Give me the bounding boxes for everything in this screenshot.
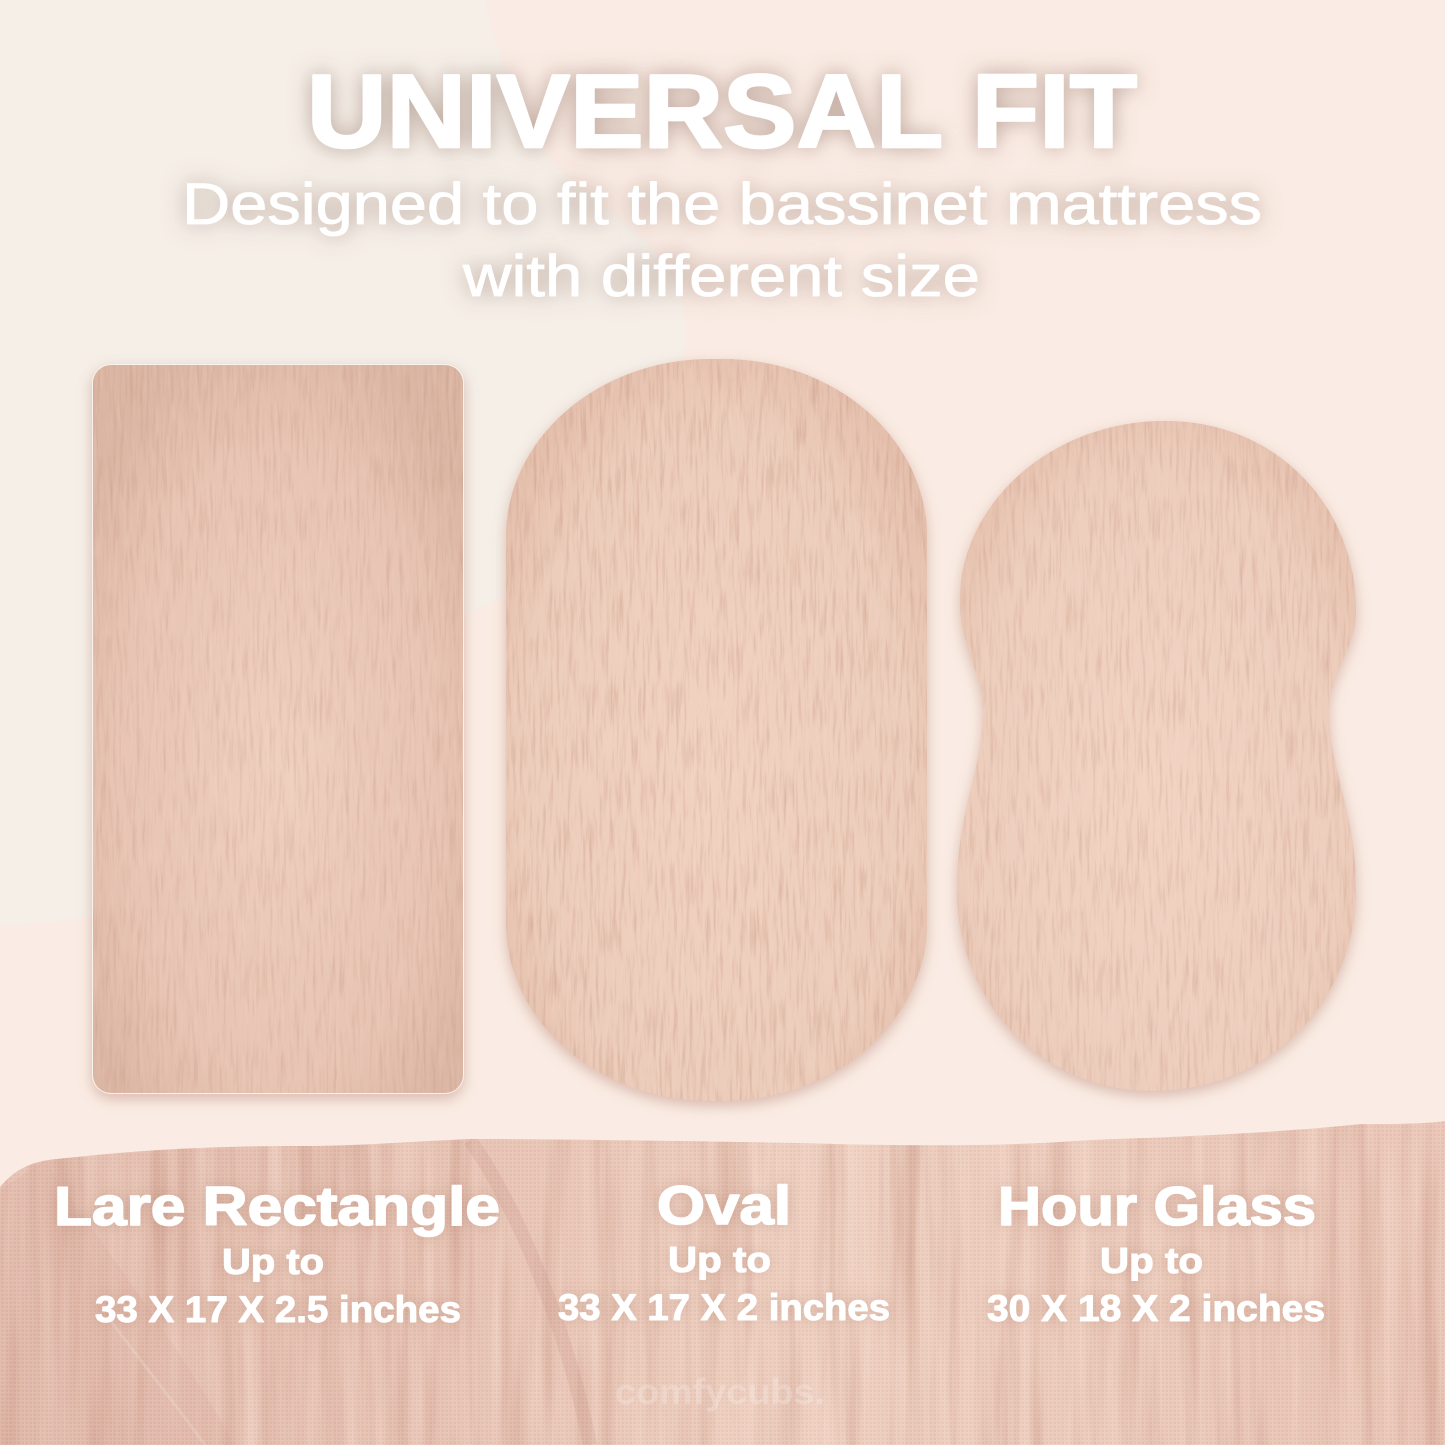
title: UNIVERSAL FIT (307, 54, 1137, 170)
mattress: oval (506, 359, 927, 1101)
label: large rectangle: Lare Rectangle (54, 1175, 500, 1237)
label: hour glass: Up to (1100, 1240, 1203, 1281)
label: large rectangle (54, 1175, 500, 1330)
label: hour glass: Hour Glass (998, 1175, 1316, 1237)
subtitle: Designed to fit the bassinet mattress (182, 172, 1262, 237)
label: hour glass (987, 1175, 1325, 1329)
label: oval: 33 X 17 X 2 inches (558, 1287, 890, 1328)
mattress: large rectangle (92, 364, 464, 1094)
subtitle (182, 172, 1262, 309)
mattress: hour glass (950, 415, 1362, 1097)
background: cream organic shape (0, 0, 686, 925)
brand watermark: comfycubs. (615, 1371, 825, 1412)
label: hour glass: 30 X 18 X 2 inches (987, 1288, 1325, 1329)
label: oval (558, 1174, 890, 1328)
label: large rectangle: 33 X 17 X 2.5 inches (95, 1289, 461, 1330)
label: oval: Oval (657, 1174, 791, 1236)
label: large rectangle: Up to (222, 1241, 324, 1282)
label: oval: Up to (668, 1239, 771, 1280)
subtitle: with different size (462, 244, 980, 309)
muslin cloth band (0, 1115, 1445, 1445)
